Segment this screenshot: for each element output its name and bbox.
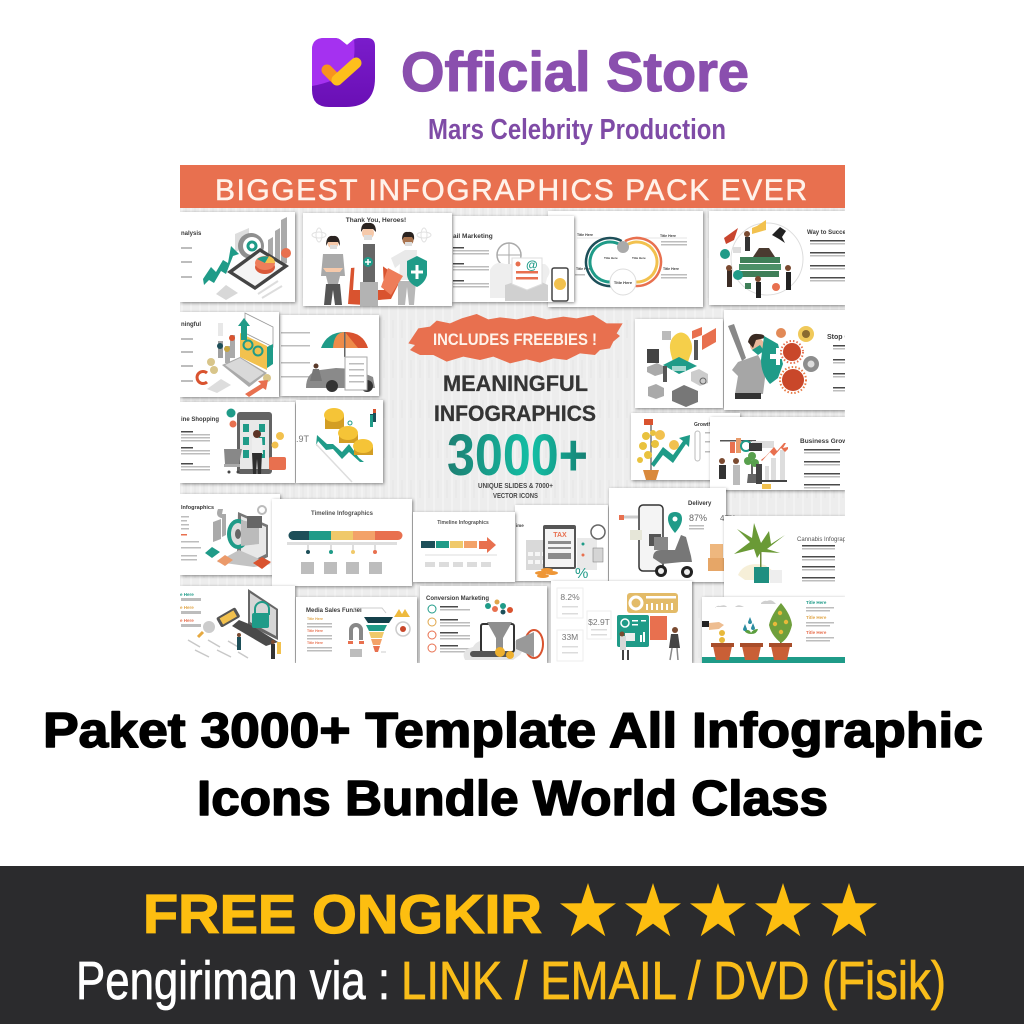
card: growing plants: Title Here	[806, 600, 827, 605]
card: business growth	[710, 417, 853, 490]
card: email marketing	[452, 216, 574, 302]
card: email marketing: @	[526, 258, 538, 272]
free ongkir label: FREE ONGKIR	[143, 883, 542, 945]
banner: biggest infographics pack ever	[180, 165, 845, 208]
card: delivery: 87%	[689, 513, 707, 523]
heading: official store: Official Store	[401, 40, 749, 103]
caption: unique slides and vector icons	[478, 483, 553, 498]
card: cannabis infographics	[724, 516, 854, 597]
card: conversion marketing: Conversion Marketing	[426, 596, 489, 602]
card: email marketing: ail Marketing	[453, 233, 493, 240]
card: circular diagram: Title Here	[576, 267, 592, 271]
card: growing plants: Title Here	[806, 615, 827, 620]
card: stop covid: Stop C	[827, 334, 850, 341]
card: cyber security laptop	[180, 586, 295, 663]
card: tax: %	[575, 565, 588, 582]
card: media sales funnel: Title Here	[307, 617, 323, 621]
card: media sales funnel	[296, 597, 417, 663]
card: media sales funnel: Title Here	[307, 629, 323, 633]
card: way to success	[709, 211, 850, 305]
card: circular diagram	[548, 211, 703, 307]
card: coins growth: .9T	[296, 434, 310, 444]
card: growing plants	[702, 597, 845, 663]
card: coins growth	[296, 400, 383, 483]
callout: includes freebies: INCLUDES FREEBIES !	[433, 330, 597, 349]
card: timeline arrow: Timeline Infographics	[437, 520, 489, 526]
heading: meaningful infographics	[435, 375, 596, 422]
card: delivery: 47%	[720, 514, 736, 523]
card: conversion marketing	[420, 586, 547, 663]
card: timeline arrow	[413, 512, 515, 582]
banner: biggest infographics pack ever: BIGGEST INFOGRAPHICS PACK EVER	[215, 174, 807, 207]
card: dashboards stats: 33M	[562, 632, 578, 642]
card: media sales funnel: Title Here	[307, 641, 323, 645]
card: circular diagram: Title Here	[632, 256, 646, 260]
footer band	[0, 866, 1024, 1024]
card: delivery: Delivery	[688, 501, 712, 507]
icon: official store badge	[312, 38, 375, 107]
heading: meaningful infographics: INFOGRAPHICS	[434, 401, 596, 426]
panel: infographics pack preview	[180, 165, 854, 663]
card: timeline infographics	[272, 499, 412, 586]
card: tax	[515, 505, 608, 582]
card: cyber security laptop: e Here	[180, 618, 194, 623]
card: dashboards stats: 8.2%	[560, 592, 580, 602]
card: growing plants: Title Here	[806, 630, 827, 635]
card: circular diagram: Title Here	[577, 233, 593, 237]
card: growth plant: Growth	[694, 422, 712, 428]
caption: unique slides and vector icons: UNIQUE SLIDES & 7000+	[478, 481, 554, 490]
card: analysis: nalysis	[181, 231, 202, 237]
card: delivery	[609, 488, 736, 582]
card: circular diagram: Title Here	[604, 256, 618, 260]
card: meaningful	[180, 312, 279, 397]
card: business growth: Business Growth	[800, 438, 853, 445]
card: circular diagram: Title Here	[614, 280, 633, 285]
heading: meaningful infographics: MEANINGFUL	[443, 371, 588, 396]
card: cyber security laptop: e Here	[180, 605, 194, 610]
card: dashboards stats: $2.9T	[588, 617, 610, 627]
card: circular diagram: Title Here	[663, 267, 679, 271]
card: online shopping: ine Shopping	[181, 417, 219, 423]
five star rating	[560, 883, 877, 936]
card: analysis	[180, 212, 295, 302]
delivery text: pengiriman via: Pengiriman via :	[76, 951, 390, 1011]
card: light bulb	[635, 319, 723, 408]
card: infographics megaphone	[180, 494, 280, 575]
card: umbrella insurance	[280, 315, 379, 396]
card: growth plant	[631, 413, 740, 480]
callout: includes freebies	[408, 314, 623, 363]
card: cyber security laptop: e Here	[180, 592, 194, 597]
product title: Icons Bundle World Class	[197, 772, 828, 826]
card: thank you heroes: Thank You, Heroes!	[346, 217, 406, 224]
product title	[43, 704, 983, 826]
caption: unique slides and vector icons: VECTOR ICONS	[493, 491, 538, 500]
card: online shopping	[180, 402, 295, 483]
card: infographics megaphone: Infographics	[181, 505, 214, 511]
card: stop covid	[724, 310, 850, 410]
card: circular diagram: Title Here	[660, 234, 676, 238]
card: tax: TAX	[553, 532, 567, 539]
card: dashboards stats	[551, 581, 692, 663]
card: meaningful: ningful	[181, 322, 201, 328]
stat: 3000+: 3000+	[447, 423, 588, 488]
card: media sales funnel: Media Sales Funnel	[306, 608, 362, 614]
card: way to success: Way to Succes	[807, 230, 850, 236]
card: cannabis infographics: Cannabis Infographic	[797, 537, 854, 543]
card: thank you heroes	[303, 213, 452, 306]
product title: Paket 3000+ Template All Infographic	[43, 704, 983, 758]
subheading: mars celebrity production: Mars Celebrity Production	[428, 114, 726, 146]
card: tax: ime	[516, 523, 524, 528]
card: timeline infographics: Timeline Infographics	[311, 511, 374, 517]
